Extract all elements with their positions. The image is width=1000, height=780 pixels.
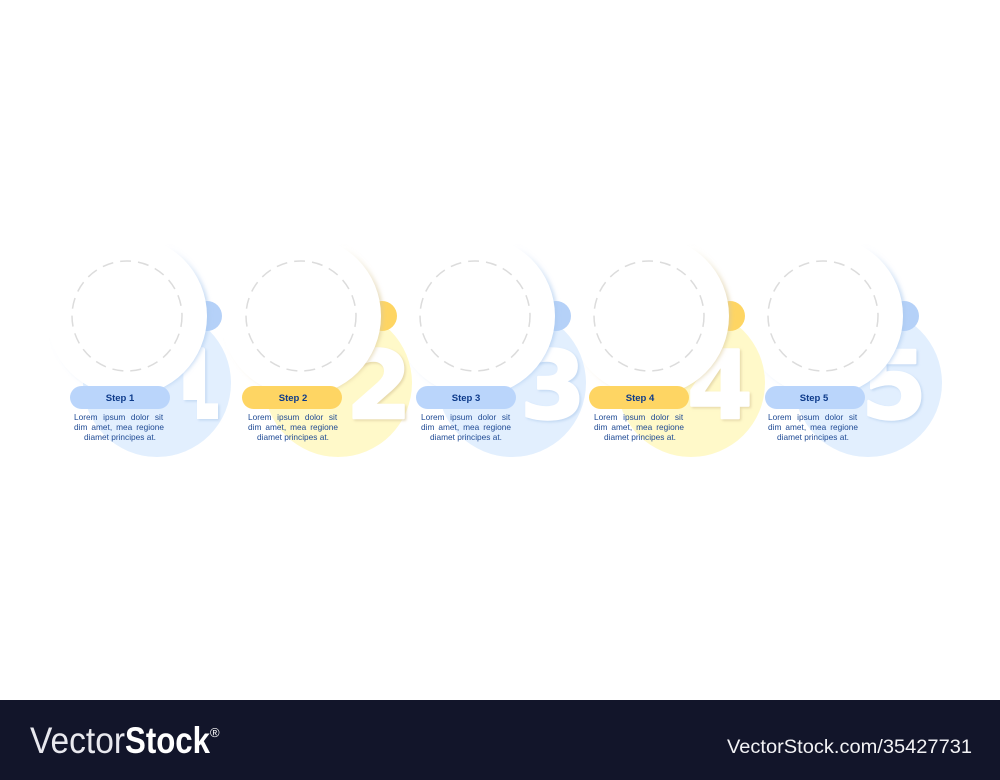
step pill xyxy=(416,386,516,409)
description: Lorem ipsum dolor sit xyxy=(74,412,164,422)
number 5: 5 xyxy=(861,332,927,441)
dashed icon placeholder xyxy=(594,261,704,371)
footer bar xyxy=(0,700,1000,780)
pale background circle xyxy=(264,309,412,457)
step pill xyxy=(589,386,689,409)
white circle shadow xyxy=(49,236,209,396)
logo word Vector: Vector xyxy=(30,720,125,761)
number 4: 4 xyxy=(687,332,753,441)
image id: VectorStock.com/35427731 xyxy=(727,736,972,758)
step pill xyxy=(70,386,170,409)
step pill xyxy=(765,386,865,409)
logo word Stock: Stock xyxy=(125,720,210,761)
number 3: 3 xyxy=(520,332,586,441)
white circle xyxy=(743,236,903,396)
number 1: 1 xyxy=(159,332,225,441)
dashed icon placeholder xyxy=(768,261,878,371)
description: dim amet, mea regione xyxy=(421,422,511,432)
step 5 xyxy=(743,236,942,457)
description: Lorem ipsum dolor sit xyxy=(421,412,511,422)
small accent circle xyxy=(367,301,397,331)
number 2: 2 xyxy=(346,332,412,441)
white circle shadow xyxy=(571,236,731,396)
description: dim amet, mea regione xyxy=(74,422,164,432)
step label: Step 1 xyxy=(106,393,135,404)
dashed icon placeholder xyxy=(420,261,530,371)
description: diamet principes at. xyxy=(777,432,849,442)
pale background circle xyxy=(438,309,586,457)
small accent circle xyxy=(889,301,919,331)
description: dim amet, mea regione xyxy=(594,422,684,432)
white circle xyxy=(221,236,381,396)
description: dim amet, mea regione xyxy=(768,422,858,432)
white circle shadow xyxy=(223,236,383,396)
description: diamet principes at. xyxy=(604,432,676,442)
description: diamet principes at. xyxy=(257,432,329,442)
step 1 xyxy=(70,254,231,457)
small accent circle xyxy=(192,301,222,331)
white circle shadow xyxy=(397,236,557,396)
step label: Step 2 xyxy=(279,393,307,404)
step label: Step 5 xyxy=(800,393,829,404)
pale background circle xyxy=(83,309,231,457)
white circle xyxy=(47,236,207,396)
small accent circle xyxy=(715,301,745,331)
step pill xyxy=(242,386,342,409)
registered mark: ® xyxy=(210,725,220,740)
description: Lorem ipsum dolor sit xyxy=(248,412,338,422)
description: Lorem ipsum dolor sit xyxy=(594,412,684,422)
step 4 xyxy=(569,236,765,457)
description: diamet principes at. xyxy=(430,432,502,442)
step label: Step 4 xyxy=(626,393,655,404)
step 2 xyxy=(221,236,412,457)
small accent circle xyxy=(541,301,571,331)
dashed icon placeholder xyxy=(72,261,182,371)
white circle xyxy=(569,236,729,396)
pale background circle xyxy=(794,309,942,457)
white circle xyxy=(395,236,555,396)
step 3 xyxy=(395,236,586,457)
description: diamet principes at. xyxy=(84,432,156,442)
pale background circle xyxy=(617,309,765,457)
description: dim amet, mea regione xyxy=(248,422,338,432)
step label: Step 3 xyxy=(452,393,480,404)
description: Lorem ipsum dolor sit xyxy=(768,412,858,422)
white circle shadow xyxy=(745,236,905,396)
dashed icon placeholder xyxy=(246,261,356,371)
